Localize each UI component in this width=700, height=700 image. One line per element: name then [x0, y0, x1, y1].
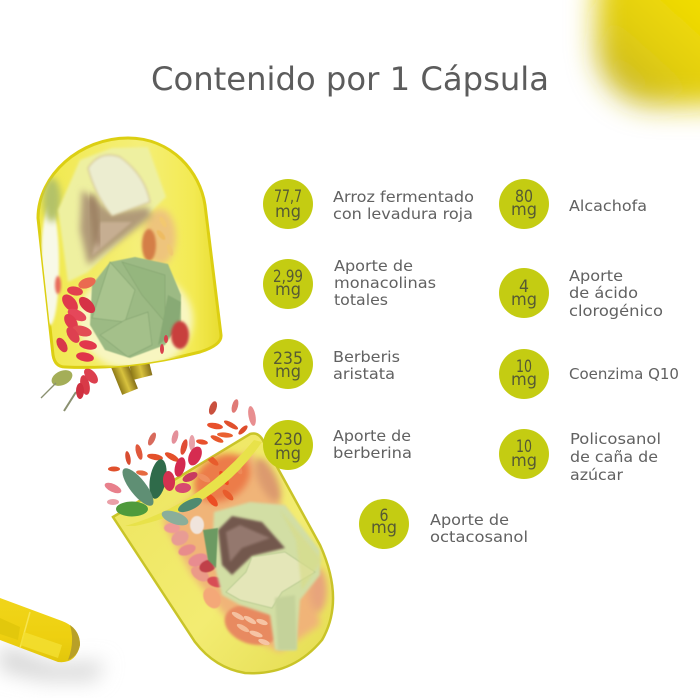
ingredient: monacolinas: mg — [275, 280, 301, 300]
title: Contenido por 1 Cápsula — [151, 60, 549, 98]
ingredient: monacolinas: totales — [334, 291, 388, 309]
ingredient: berberis aristata: 235 — [273, 349, 303, 369]
ingredient: arroz fermentado: con levadura roja — [333, 205, 473, 223]
artichoke — [203, 502, 322, 650]
ingredient: octacosanol: octacosanol — [430, 528, 528, 546]
ingredient: octacosanol: mg — [371, 518, 397, 538]
ingredient: arroz fermentado: mg — [275, 202, 301, 222]
ingredient: berberina: 230 — [274, 430, 302, 450]
ingredient: berberina — [263, 420, 412, 470]
leaves and berries — [116, 444, 205, 528]
ingredient: coenzima q10 — [499, 349, 679, 399]
pill shadow — [0, 645, 105, 680]
ingredient: octacosanol — [359, 499, 528, 549]
ingredient: octacosanol: 6 — [380, 506, 388, 526]
ingredient: alcachofa: 80 — [515, 187, 533, 207]
rim band — [125, 440, 262, 526]
rice grains — [142, 209, 176, 265]
ingredient: acido clorogenico: 4 — [519, 277, 529, 297]
ingredient: alcachofa — [499, 179, 647, 229]
ingredient: berberis aristata: aristata — [333, 365, 395, 383]
artichoke cut, cream — [88, 155, 150, 216]
ingredient: coenzima q10: mg — [511, 370, 537, 390]
ingredient: acido clorogenico — [499, 267, 663, 320]
rice grains, bottom — [219, 568, 327, 652]
ingredient: policosanol: azúcar — [570, 466, 624, 484]
ingredient: coenzima q10: 10 — [516, 357, 532, 377]
ingredient: policosanol: 10 — [516, 437, 532, 457]
pale artichoke overlay — [58, 147, 166, 282]
capsule contents — [41, 147, 193, 370]
lower berries and leaf — [41, 366, 101, 411]
pill body — [0, 598, 80, 662]
capsule stems — [111, 362, 152, 395]
scattered petals — [103, 398, 257, 505]
ingredient: berberis aristata — [263, 339, 400, 389]
ingredient: berberis aristata: mg — [275, 362, 301, 382]
small yellow pill — [0, 598, 105, 680]
ingredient: policosanol: de caña de — [570, 448, 658, 466]
ingredient: acido clorogenico: de ácido — [569, 284, 638, 302]
ingredient: arroz fermentado — [263, 179, 474, 229]
ingredient: acido clorogenico: clorogénico — [569, 302, 663, 320]
background yellow glow — [596, 0, 700, 106]
ingredient: arroz fermentado: Arroz fermentado — [333, 188, 474, 206]
ingredient: policosanol: mg — [511, 451, 537, 471]
ingredient: monacolinas — [263, 257, 436, 309]
red berries, right — [160, 321, 189, 354]
red berries — [54, 275, 98, 363]
ingredient: berberina: Aporte de — [333, 427, 411, 445]
ingredient: policosanol — [499, 429, 661, 484]
artichoke cut, brown — [80, 190, 152, 265]
pale artichoke glow — [77, 270, 193, 370]
ingredient: berberina: mg — [275, 444, 301, 464]
orange glow — [162, 450, 320, 652]
ingredient: alcachofa: Alcachofa — [569, 197, 647, 215]
ingredient: berberina: berberina — [333, 444, 412, 462]
green artichoke — [90, 257, 181, 358]
ingredient: monacolinas: Aporte de — [334, 257, 413, 275]
ingredient: berberis aristata: Berberis — [333, 348, 400, 366]
ingredient: monacolinas: monacolinas — [334, 274, 436, 292]
ingredient: octacosanol: Aporte de — [430, 511, 509, 529]
lower capsule half — [113, 433, 333, 673]
rice grains, orange — [190, 449, 285, 506]
ingredient: alcachofa: mg — [511, 200, 537, 220]
ingredient: arroz fermentado: 77,7 — [274, 187, 302, 207]
capsule body — [113, 433, 333, 673]
ingredient: monacolinas: 2,99 — [273, 267, 303, 287]
ingredient: coenzima q10: Coenzima Q10 — [569, 365, 679, 383]
upper capsule half — [38, 138, 221, 411]
ingredient: acido clorogenico: mg — [511, 290, 537, 310]
capsule body — [38, 138, 221, 367]
capsule contents — [125, 440, 327, 652]
ingredient: acido clorogenico: Aporte — [569, 267, 623, 285]
ingredient: policosanol: Policosanol — [570, 430, 661, 448]
pink grains — [164, 516, 226, 612]
